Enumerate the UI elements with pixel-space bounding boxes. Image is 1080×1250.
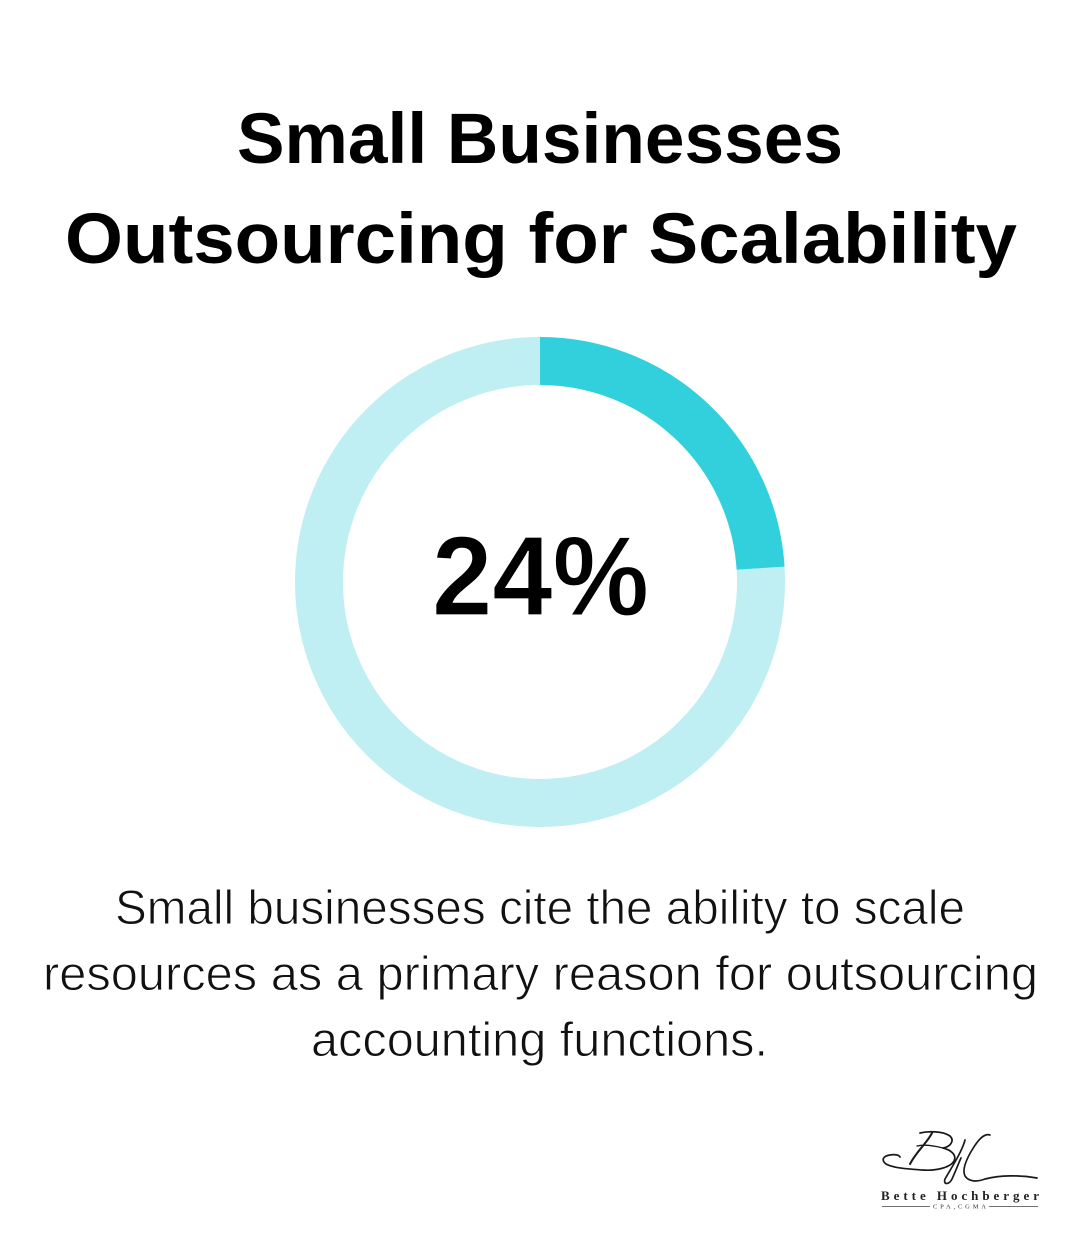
logo credentials: CPA,CGMA: [933, 1204, 986, 1210]
description text: accounting functions.: [311, 1014, 768, 1067]
description text: Small businesses cite the ability to scale: [115, 882, 965, 935]
title: Outsourcing for Scalability: [65, 200, 1018, 279]
percentage value: 24%: [432, 513, 649, 639]
logo name: Bette Hochberger: [881, 1188, 1039, 1203]
title: [65, 100, 1018, 279]
description text: [43, 882, 1038, 1067]
donut chart: 24%: [319, 361, 761, 803]
logo: Bette Hochberger signature: [881, 1132, 1039, 1210]
title: Small Businesses: [237, 100, 843, 179]
description text: resources as a primary reason for outsourcing: [43, 948, 1038, 1001]
